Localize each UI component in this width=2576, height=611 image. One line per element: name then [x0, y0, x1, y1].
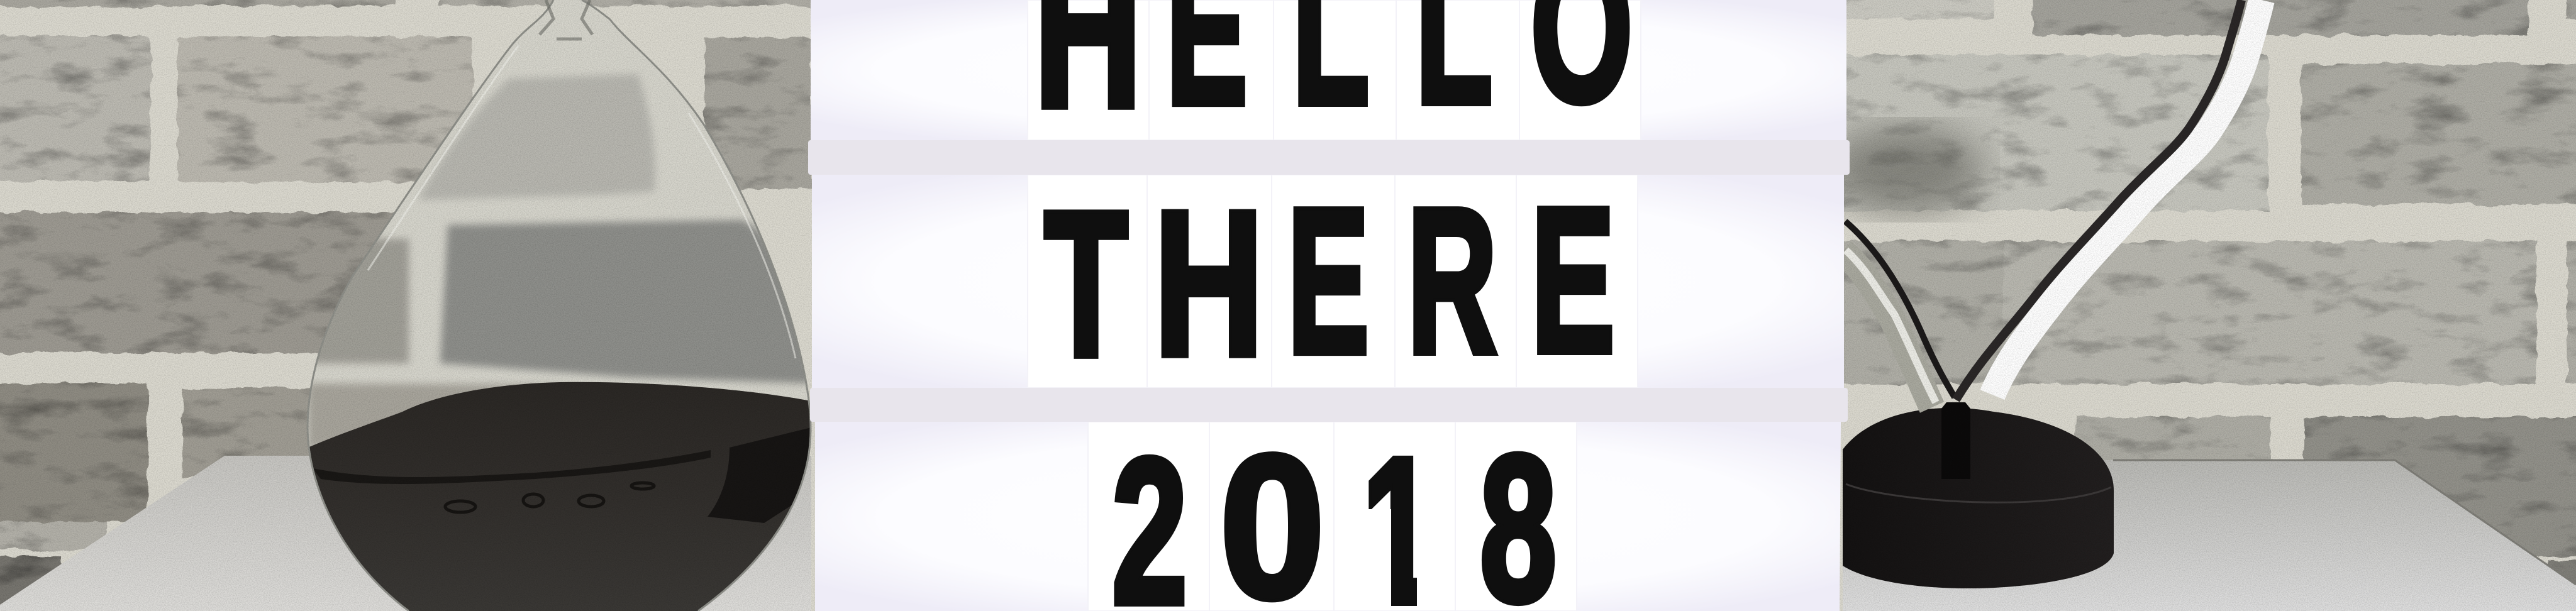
refracted brick: upper [418, 74, 655, 200]
light box [808, 0, 1850, 611]
hourglass [302, 0, 818, 611]
shelf: right [1843, 460, 2576, 611]
word: THERE: E [1531, 165, 1615, 395]
left arm: silver band [1843, 251, 1932, 407]
letter tiles row 3 [1088, 422, 1577, 611]
lamp base [1843, 408, 2114, 588]
right arm: dark edge [1956, 0, 2241, 400]
bricks: left wall [0, 0, 811, 611]
box panels [811, 0, 1846, 140]
dark sand [302, 382, 818, 611]
sand right shadow [708, 427, 811, 523]
lamp [1843, 0, 2262, 588]
ledge 1 [808, 140, 1850, 175]
glass outline [308, 0, 811, 611]
word: 2018 [1114, 451, 1555, 607]
letter tiles row 2 [1028, 175, 1638, 388]
word: THERE [1045, 165, 1615, 399]
refracted brick: lower [440, 220, 811, 383]
left arm: dark edge [1845, 221, 1955, 397]
right arm: white band [1992, 0, 2262, 395]
wall shadow behind lamp [1827, 126, 1984, 214]
word: THERE: R [1407, 166, 1497, 396]
ledge 2 [810, 388, 1848, 422]
glass bulb [302, 0, 818, 611]
lamp stem [1941, 402, 1970, 479]
word: THERE: E [1287, 166, 1369, 397]
sand inner band [313, 450, 711, 484]
word: HELLO [1034, 0, 1633, 152]
letter tiles row 1 [1028, 0, 1641, 140]
word: THERE: H [1154, 168, 1263, 399]
shelf: left [0, 456, 811, 611]
word: THERE: T [1045, 168, 1128, 399]
bricks: right wall [1843, 0, 2576, 598]
letter reflections [445, 483, 654, 512]
